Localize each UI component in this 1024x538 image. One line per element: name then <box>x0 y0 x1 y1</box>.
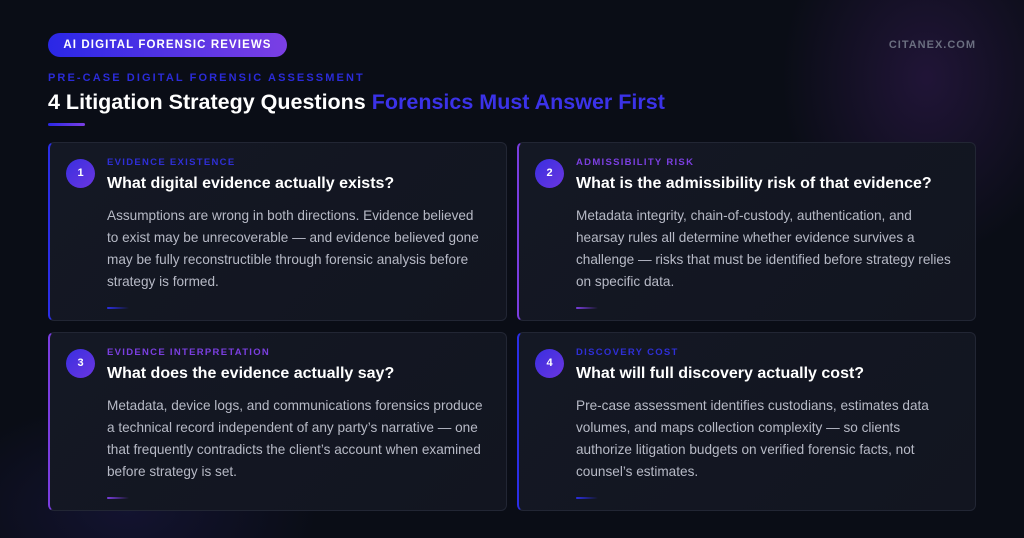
question: What does the evidence actually say? <box>107 365 394 382</box>
kicker: PRE-CASE DIGITAL FORENSIC ASSESSMENT <box>48 72 365 84</box>
body text: Metadata integrity, chain-of-custody, authentication, and hearsay rules all determine whether evidence survives a challenge — risks that must be identified before strategy relies on specific data. <box>576 208 951 289</box>
question: What will full discovery actually cost? <box>576 365 864 382</box>
panel: discovery cost <box>517 332 976 511</box>
title: 4 Litigation Strategy Questions Forensics Must Answer First <box>48 90 665 114</box>
body text: Assumptions are wrong in both directions. Evidence believed to exist may be unrecoverable — and evidence believed gone may be fully reconstructible through forensic analysis before strategy is formed. <box>107 208 479 289</box>
question: What digital evidence actually exists? <box>107 175 394 192</box>
badge pill <box>48 33 287 57</box>
number badge 1: 1 <box>77 167 84 179</box>
title underline <box>48 123 85 126</box>
label: EVIDENCE EXISTENCE <box>107 157 235 168</box>
badge pill: AI DIGITAL FORENSIC REVIEWS <box>63 39 272 51</box>
number badge 3 <box>66 349 95 378</box>
number badge 2 <box>535 159 564 188</box>
label: ADMISSIBILITY RISK <box>576 157 694 168</box>
number badge 4 <box>535 349 564 378</box>
panel: admissibility risk <box>517 142 976 321</box>
number badge 2: 2 <box>546 167 553 179</box>
label: DISCOVERY COST <box>576 347 679 358</box>
panel: evidence existence <box>48 142 507 321</box>
label: EVIDENCE INTERPRETATION <box>107 347 270 358</box>
number badge 1 <box>66 159 95 188</box>
body text: Metadata, device logs, and communications forensics produce a technical record independent of any party’s narrative — one that frequently contradicts the client’s account when examined before strategy is set. <box>107 398 483 479</box>
site name: CITANEX.COM <box>889 39 976 51</box>
number badge 4: 4 <box>546 357 553 369</box>
panel: evidence interpretation <box>48 332 507 511</box>
number badge 3: 3 <box>77 357 84 369</box>
question: What is the admissibility risk of that evidence? <box>576 175 932 192</box>
body text: Pre-case assessment identifies custodians, estimates data volumes, and maps collection complexity — so clients authorize litigation budgets on verified forensic facts, not counsel’s estimates. <box>576 398 929 479</box>
